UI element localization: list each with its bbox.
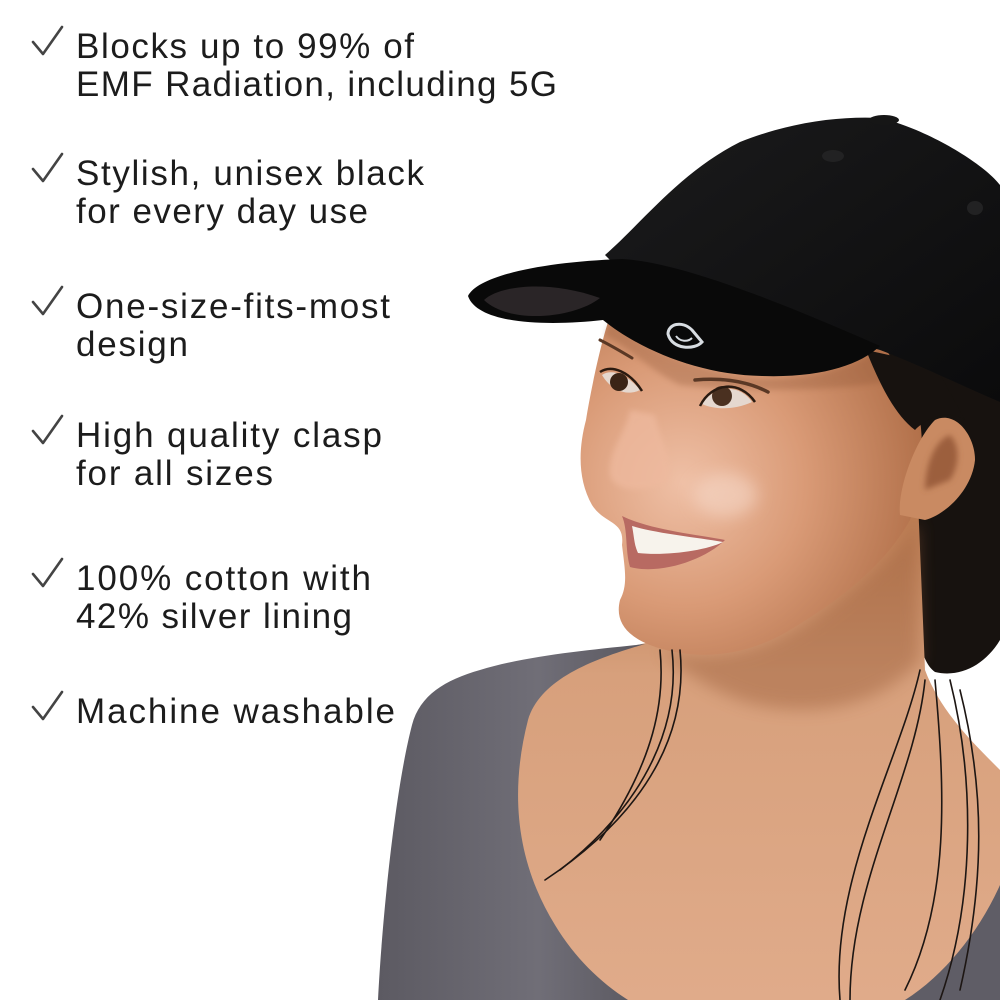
neck and chest — [510, 500, 1000, 1000]
ear inner — [925, 435, 958, 490]
feature: cotton: 42% silver lining — [76, 597, 352, 636]
face — [581, 310, 922, 655]
right brow — [695, 379, 768, 392]
cap visor — [468, 259, 880, 376]
neck shadow — [660, 520, 920, 710]
cap crown — [605, 118, 1000, 402]
feature list — [33, 27, 557, 731]
feature: cotton — [33, 559, 371, 636]
visor underside — [484, 286, 600, 316]
shirt right shoulder — [905, 885, 1000, 1000]
feature: clasp — [33, 416, 382, 493]
feature: blocks EMF: EMF Radiation, including 5G — [76, 65, 557, 104]
mouth — [622, 516, 725, 569]
cheek highlight — [693, 473, 757, 517]
feature: washable: Machine washable — [76, 692, 395, 731]
feature: clasp: for all sizes — [76, 454, 273, 493]
feature: blocks EMF — [33, 27, 557, 104]
right eye — [700, 386, 755, 408]
cap button — [869, 115, 899, 125]
feature: cotton: 100% cotton with — [76, 559, 371, 598]
feature: one size — [33, 287, 390, 364]
feature: stylish — [33, 154, 424, 231]
left eye — [600, 369, 642, 393]
photo: woman wearing cap — [378, 115, 1000, 1000]
shirt — [378, 644, 645, 1000]
feature: clasp: High quality clasp — [76, 416, 382, 455]
feature: blocks EMF: Blocks up to 99% of — [76, 27, 414, 66]
nose — [610, 410, 670, 489]
feature: stylish: for every day use — [76, 192, 368, 231]
cap eyelets — [822, 150, 983, 215]
hair around ear — [866, 350, 965, 430]
cap logo — [668, 324, 702, 347]
feature: stylish: Stylish, unisex black — [76, 154, 424, 193]
hair strands — [545, 650, 979, 1000]
feature: one size: One-size-fits-most — [76, 287, 390, 326]
left brow — [600, 340, 632, 358]
ear — [900, 418, 975, 520]
hair behind — [850, 330, 1000, 673]
under-cap shadow — [605, 322, 895, 390]
feature: one size: design — [76, 325, 188, 364]
